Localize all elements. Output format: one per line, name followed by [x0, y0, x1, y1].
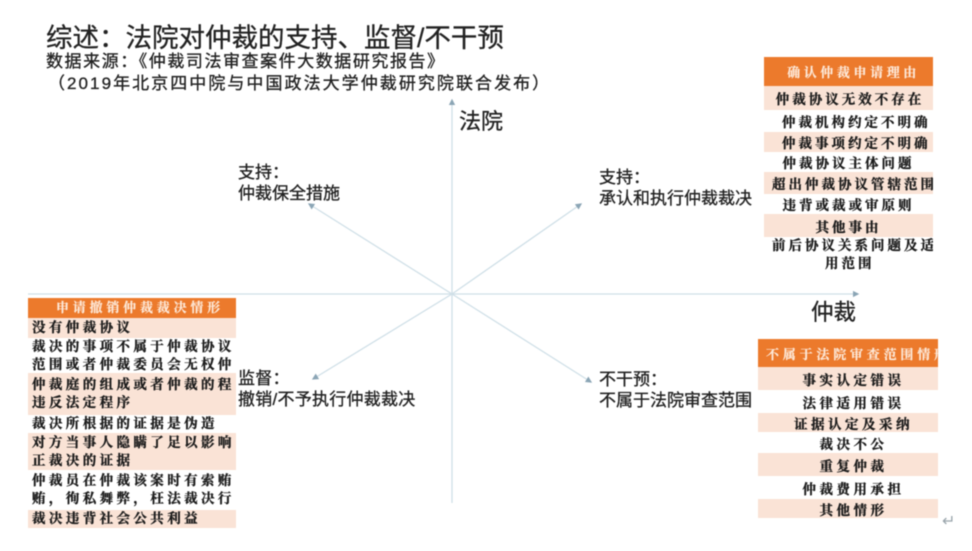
publication note: （2019年北京四中院与中国政法大学仲裁研究院联合发布）: [48, 74, 551, 93]
panel header: [28, 298, 236, 318]
label: support, recognition and enforcement: 承认和执行仲裁裁决: [599, 189, 752, 208]
panel: reasons for confirming arbitration application: 违背或裁或审原则: [782, 198, 914, 213]
panel: matters outside court review: 仲裁费用承担: [802, 482, 904, 496]
panel: circumstances for setting aside arbitral awards: [27, 297, 237, 528]
panel: reasons for confirming arbitration application: 超出仲裁协议管辖范围: [772, 177, 933, 192]
panel: matters outside court review: 重复仲裁: [820, 458, 888, 474]
panel: reasons for confirming arbitration application: [763, 56, 934, 270]
panel: matters outside court review: 证据认定及采纳: [794, 416, 913, 432]
panel: circumstances for setting aside arbitral awards: 没有仲裁协议: [32, 320, 133, 335]
label: support, recognition and enforcement: [598, 168, 752, 208]
panel: circumstances for setting aside arbitral awards: 裁决的事项不属于仲裁协议: [32, 338, 235, 354]
label: supervision: 监督：: [238, 369, 290, 388]
horizontal axis arrow: [28, 293, 858, 295]
label: supervision: 撤销/不予执行仲裁裁决: [238, 390, 415, 409]
icon: paragraph return mark: ↵: [942, 513, 955, 530]
label: non-intervention: [599, 370, 752, 410]
arrow: support, upper right: [452, 204, 581, 294]
label: non-intervention: 不干预：: [599, 370, 667, 389]
panel: circumstances for setting aside arbitral awards: 裁决违背社会公共利益: [32, 511, 201, 526]
panel: circumstances for setting aside arbitral awards: 正裁决的证据: [32, 452, 133, 468]
arrow: supervision, lower left: [313, 294, 452, 379]
label: supervision: [238, 368, 416, 409]
panel header: 申请撤销仲裁裁决情形: [56, 300, 224, 315]
panel: circumstances for setting aside arbitral awards: 范围或者仲裁委员会无权仲: [32, 356, 235, 372]
title: 综述：法院对仲裁的支持、监督/不干预: [46, 23, 504, 53]
panel: reasons for confirming arbitration application: 其他事由: [816, 220, 882, 234]
panel: matters outside court review: 事实认定错误: [802, 372, 904, 388]
panel header: 确认仲裁申请理由: [787, 65, 920, 80]
label: non-intervention: 不属于法院审查范围: [599, 391, 752, 410]
panel: reasons for confirming arbitration application: 用范围: [825, 256, 874, 270]
panel: reasons for confirming arbitration application: 前后协议关系问题及适: [772, 238, 933, 253]
panel: matters outside court review: 裁决不公: [820, 436, 888, 452]
panel: matters outside court review: 法律适用错误: [802, 396, 904, 410]
panel: reasons for confirming arbitration application: 仲裁事项约定不明确: [782, 136, 930, 151]
label: support, preservation measures: 仲裁保全措施: [238, 184, 340, 203]
arrow: non-intervention, lower right: [452, 294, 591, 382]
panel: reasons for confirming arbitration application: 仲裁协议主体问题: [782, 156, 914, 171]
panel: matters outside court review: 其他情形: [820, 502, 888, 518]
axis label: court: 法院: [459, 109, 503, 134]
panel header: [764, 57, 933, 86]
data source line: 数据来源：《仲裁司法审查案件大数据研究报告》: [46, 52, 446, 71]
label: support, preservation measures: 支持：: [238, 163, 289, 182]
panel: circumstances for setting aside arbitral awards: 违反法定程序: [32, 395, 133, 410]
vertical axis arrow: [451, 100, 453, 503]
panel: circumstances for setting aside arbitral awards: 仲裁庭的组成或者仲裁的程: [32, 377, 235, 392]
panel: circumstances for setting aside arbitral awards: 仲裁员在仲裁该案时有索贿: [32, 473, 235, 488]
panel: circumstances for setting aside arbitral awards: 贿，徇私舞弊，枉法裁决行: [32, 491, 235, 506]
panel: matters outside court review: [757, 338, 939, 518]
panel: reasons for confirming arbitration application: 仲裁协议无效不存在: [776, 92, 924, 107]
label: support, recognition and enforcement: 支持：: [599, 168, 650, 187]
panel: circumstances for setting aside arbitral awards: 裁决所根据的证据是伪造: [32, 416, 218, 431]
axis label: arbitration: 仲裁: [811, 300, 856, 325]
arrow: support, upper left: [309, 204, 452, 294]
label: support, preservation measures: [238, 162, 340, 203]
panel: circumstances for setting aside arbitral awards: 对方当事人隐瞒了足以影响: [32, 434, 235, 450]
panel header: [758, 339, 938, 367]
panel: reasons for confirming arbitration application: 仲裁机构约定不明确: [782, 115, 930, 130]
